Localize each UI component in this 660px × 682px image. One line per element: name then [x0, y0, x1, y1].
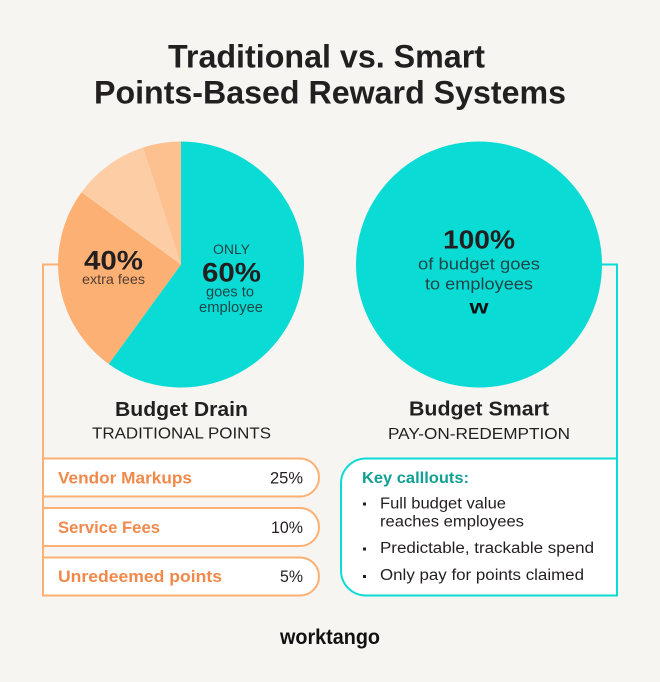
pie label: 40% [82, 246, 145, 287]
row: unredeemed points: 5% [280, 567, 303, 586]
row: service fees: Service Fees [58, 518, 160, 537]
row: vendor markups: 25% [270, 468, 303, 488]
bullet: full budget value: reaches employees [380, 514, 524, 530]
row: service fees: 10% [271, 518, 303, 537]
heading: budget drain: TRADITIONAL POINTS [92, 426, 271, 442]
heading: budget drain: Budget Drain [115, 399, 248, 421]
pie chart: budget smart [356, 142, 602, 388]
pie label: 100%: to employees [425, 274, 533, 294]
heading: budget smart: PAY-ON-REDEMPTION [388, 426, 570, 443]
row: unredeemed points: Unredeemed points [58, 567, 222, 586]
connector: smart [600, 264, 617, 596]
heading: budget drain [92, 399, 271, 442]
title [94, 38, 566, 110]
pie label: 40%: 40% [84, 246, 143, 276]
row: service fees [43, 508, 319, 546]
heading: budget smart [388, 398, 570, 443]
bullet: full budget value [363, 496, 524, 530]
pie label: 40%: extra fees [82, 271, 145, 287]
bullet: full budget value: Full budget value [380, 496, 506, 512]
title: Points-Based Reward Systems [94, 74, 566, 110]
icon: worktango w mark: w [468, 298, 489, 318]
pie label: 60%: employee [199, 299, 263, 316]
bullet: predictable spend: Predictable, trackable spend [380, 540, 594, 557]
pie label: 60%: goes to [206, 284, 254, 300]
pie label: 60%: 60% [202, 258, 261, 288]
heading: budget smart: Budget Smart [409, 398, 549, 420]
pie chart: budget drain [58, 142, 304, 388]
row: vendor markups [43, 458, 319, 496]
row: vendor markups: Vendor Markups [58, 468, 192, 488]
pie label: 100% [418, 224, 540, 294]
pie label: 60% [199, 241, 263, 316]
panel: key callouts [341, 458, 617, 596]
bullet: pay for points claimed: Only pay for points claimed [380, 567, 584, 584]
pie label: 100%: 100% [443, 224, 515, 254]
callouts heading: Key calllouts: [362, 470, 469, 487]
title: Traditional vs. Smart [168, 38, 485, 74]
pie label: 100%: of budget goes [418, 254, 540, 274]
logo: worktango: worktango [279, 626, 380, 649]
pie label: 60%: ONLY [213, 241, 251, 257]
connector: traditional [43, 264, 60, 596]
row: unredeemed points [43, 558, 319, 596]
